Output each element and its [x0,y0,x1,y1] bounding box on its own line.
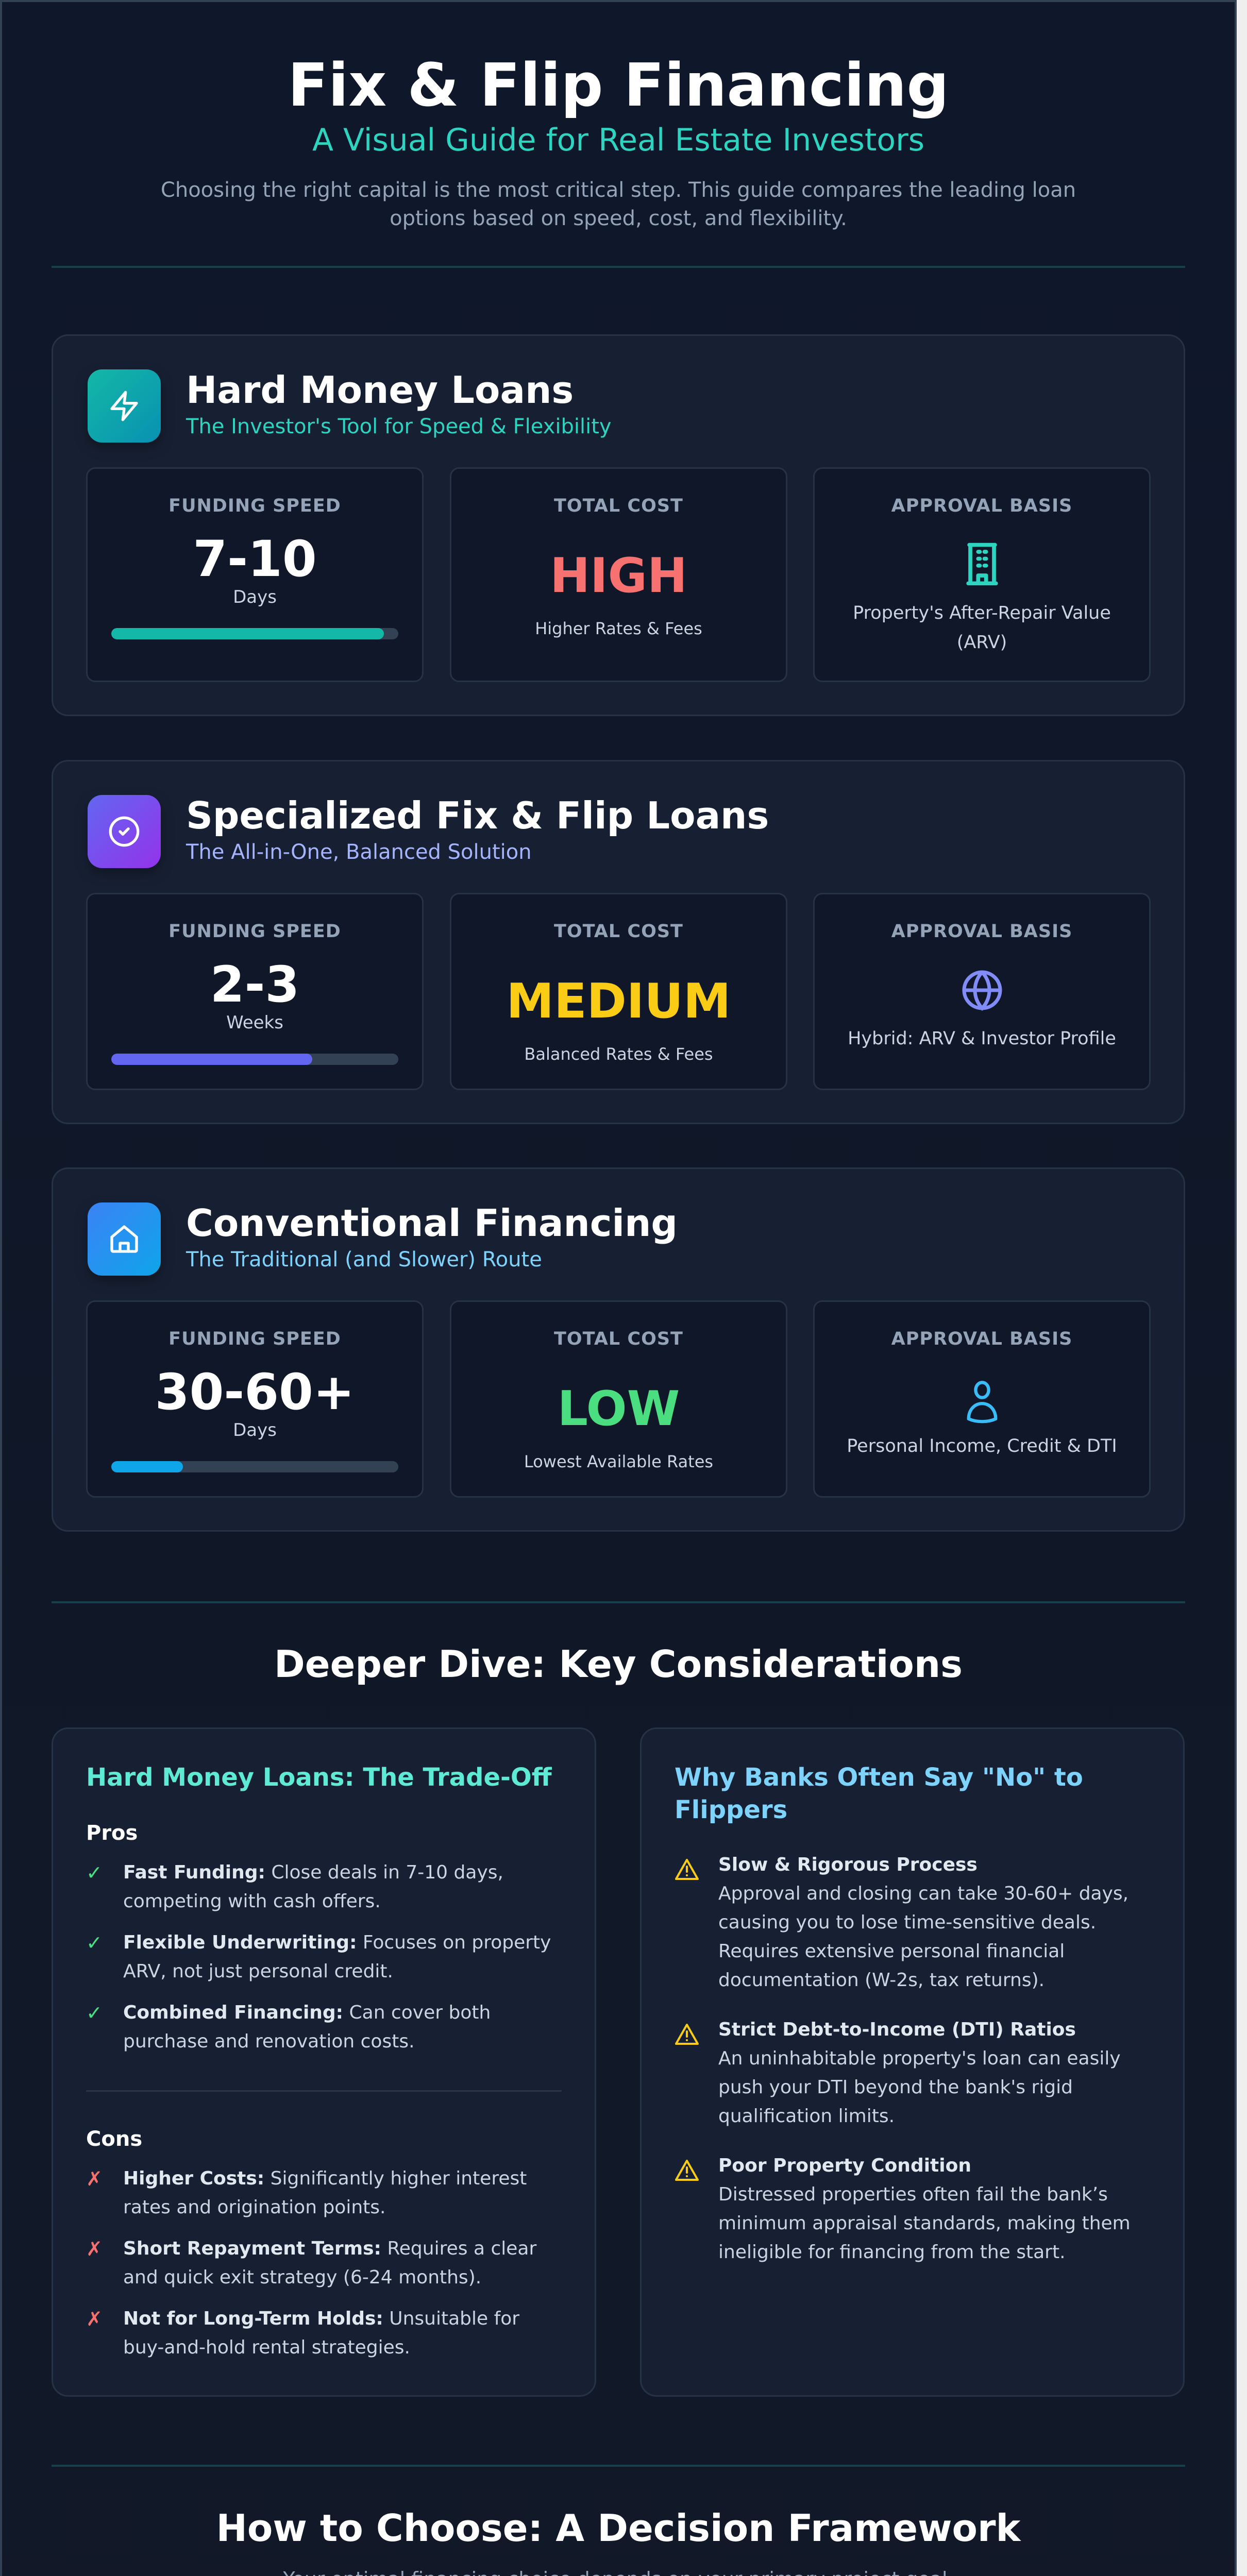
pros list [86,1861,551,2052]
metric: funding speed [86,467,424,682]
metric: approval basis: APPROVAL BASIS [891,496,1072,516]
metric: approval basis [813,1300,1151,1498]
metric: funding speed [86,1300,424,1498]
warning list: Distressed properties often fail the bank’s minimum appraisal standards, making them ineligible for financing from the start. [718,2184,1131,2263]
icon: check circle [88,795,161,868]
heading: Conventional Financing [186,1201,678,1245]
metric: approval basis: Personal Income, Credit & DTI [847,1436,1117,1456]
subheading: The Traditional (and Slower) Route [186,1248,542,1272]
cons list: ✗ [86,2167,103,2190]
metric: total cost: TOTAL COST [554,496,683,516]
panel: specialized fix & flip loans [52,760,1185,1124]
cons list: ✗ [86,2308,103,2330]
metric: total cost: Lowest Available Rates [524,1452,713,1471]
metric: total cost: Balanced Rates & Fees [524,1044,713,1064]
metric: approval basis: Hybrid: ARV & Investor Profile [848,1028,1116,1049]
pros list: Flexible Underwriting: Focuses on property ARV, not just personal credit. [123,1932,551,1982]
metric: approval basis: Property's After-Repair Value (ARV) [853,603,1111,653]
metric: approval basis [813,893,1151,1090]
warning list [675,1854,1131,2263]
cons list: Higher Costs: Significantly higher interest rates and origination points. [123,2168,527,2218]
metric: funding speed: FUNDING SPEED [168,921,341,942]
icon: lightning [88,369,161,443]
metric: approval basis: APPROVAL BASIS [891,921,1072,942]
metric: total cost: MEDIUM [507,973,731,1029]
metric: approval basis: APPROVAL BASIS [891,1329,1072,1349]
cons heading: Cons [86,2127,142,2151]
metric: funding speed: 2-3 [210,956,299,1013]
warning list: An uninhabitable property's loan can easily push your DTI beyond the bank's rigid qualification limits. [718,2048,1121,2127]
warning list: Approval and closing can take 30-60+ days, causing you to lose time-sensitive deals. Requires extensive personal financial documentation (W-2s, tax returns). [718,1883,1128,1991]
pros list: Combined Financing: Can cover both purchase and renovation costs. [123,2002,491,2052]
panel: hard money trade-off [52,1727,596,2397]
metric: funding speed: 7-10 [193,530,317,588]
subheading: The All-in-One, Balanced Solution [186,840,532,864]
panel title: Why Banks Often Say "No" to Flippers [675,1763,1083,1824]
panel: hard money loans [52,334,1185,716]
metric: total cost [450,1300,787,1498]
metric: total cost: TOTAL COST [554,1329,683,1349]
metric: total cost: Higher Rates & Fees [535,619,702,638]
warning list: Poor Property Condition [718,2155,971,2176]
panel title: Hard Money Loans: The Trade-Off [86,1763,552,1792]
cons list: ✗ [86,2238,103,2260]
metric: total cost [450,467,787,682]
metric: total cost: TOTAL COST [554,921,683,942]
metric: funding speed: 30-60+ [155,1363,355,1421]
metric: funding speed: FUNDING SPEED [168,496,341,516]
metric: approval basis [813,467,1151,682]
heading: deeper dive: Deeper Dive: Key Considerations [274,1642,963,1686]
title: Fix & Flip Financing [288,51,949,120]
metric: funding speed [86,893,424,1090]
cons list: Short Repayment Terms: Requires a clear and quick exit strategy (6-24 months). [123,2238,536,2288]
heading: Specialized Fix & Flip Loans [186,794,769,837]
metric: funding speed: Weeks [226,1012,283,1033]
warning list: Strict Debt-to-Income (DTI) Ratios [718,2019,1076,2040]
panel: why banks say no [640,1727,1185,2397]
cons list: Not for Long-Term Holds: Unsuitable for buy-and-hold rental strategies. [123,2308,519,2358]
subheading: The Investor's Tool for Speed & Flexibility [186,415,612,438]
heading: Hard Money Loans [186,368,574,412]
intro text: Choosing the right capital is the most critical step. This guide compares the leading loan options based on speed, cost, and flexibility. [161,178,1076,230]
metric: funding speed: Days [233,1420,277,1440]
pros list: ✓ [86,1861,103,1884]
pros list: ✓ [86,2002,103,2024]
metric: funding speed: FUNDING SPEED [168,1329,341,1349]
metric: total cost [450,893,787,1090]
pros list: ✓ [86,1931,103,1954]
pros list: Fast Funding: Close deals in 7-10 days, competing with cash offers. [123,1862,503,1912]
icon: house [88,1202,161,1276]
heading: decision framework: How to Choose: A Decision Framework [216,2506,1020,2550]
panel: conventional financing [52,1167,1185,1532]
cons list [86,2167,537,2358]
pros heading: Pros [86,1821,138,1845]
warning list: Slow & Rigorous Process [718,1854,978,1875]
metric: total cost: HIGH [550,548,687,603]
metric: total cost: LOW [558,1381,680,1436]
metric: funding speed: Days [233,587,277,607]
subtitle: A Visual Guide for Real Estate Investors [312,122,924,158]
